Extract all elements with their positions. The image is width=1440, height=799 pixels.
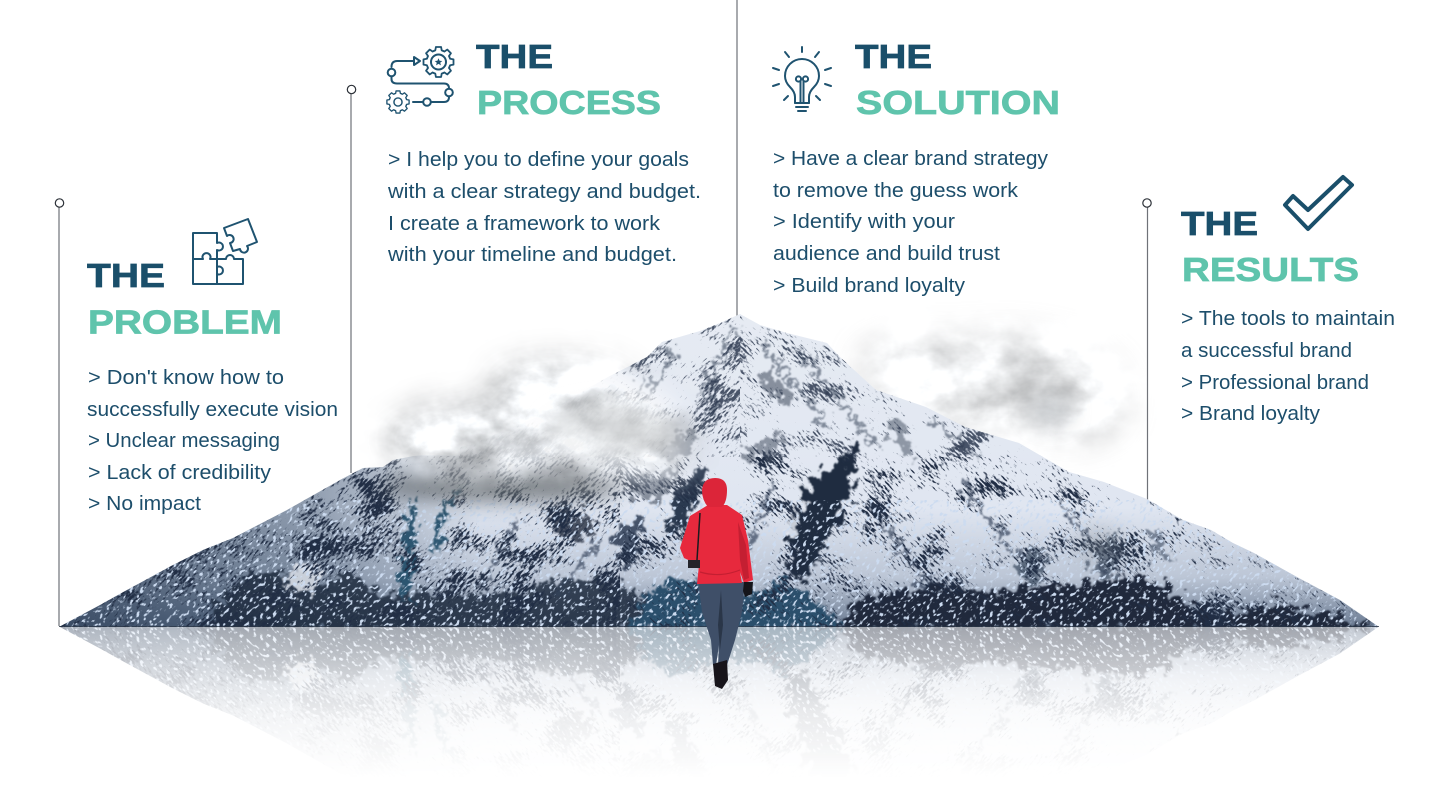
text: problem list: > Don't know how to xyxy=(88,367,284,389)
text: problem list: > No impact xyxy=(88,493,201,515)
text: solution list: > Identify with your xyxy=(773,211,955,233)
text: solution list: > Have a clear brand strategy xyxy=(773,148,1048,170)
icon: check mark xyxy=(1285,177,1352,229)
guide line: problem xyxy=(55,199,64,626)
text: process paragraph: > I help you to define your goals xyxy=(388,149,689,171)
icon: light bulb xyxy=(773,47,831,111)
boots xyxy=(713,660,728,689)
jacket xyxy=(680,505,753,584)
heading: the solution: SOLUTION xyxy=(856,84,1060,121)
text: problem list: > Lack of credibility xyxy=(88,462,271,484)
strap and camera xyxy=(697,513,700,560)
mountain xyxy=(50,305,1390,630)
heading: the results: THE xyxy=(1181,205,1258,242)
heading: the results: RESULTS xyxy=(1182,251,1359,288)
text: problem list: successfully execute vision xyxy=(87,399,338,421)
heading: the results xyxy=(1181,205,1359,288)
text: solution list xyxy=(773,148,1048,297)
heading: the problem xyxy=(87,257,282,340)
text: results list: > The tools to maintain xyxy=(1181,308,1395,330)
cloud behind mountain right xyxy=(860,335,1125,441)
text: process paragraph: I create a framework to work xyxy=(388,213,661,235)
text: process paragraph: with a clear strategy and budget. xyxy=(387,181,701,203)
hood xyxy=(702,478,727,507)
text: results list: > Brand loyalty xyxy=(1181,403,1320,425)
text: results list: a successful brand xyxy=(1181,340,1352,362)
glove xyxy=(743,582,753,597)
guide line: process xyxy=(347,85,356,473)
text: solution list: audience and build trust xyxy=(773,243,1000,265)
guide line: results xyxy=(1143,199,1151,500)
heading: the problem: THE xyxy=(87,257,165,294)
text: results list: > Professional brand xyxy=(1181,372,1369,394)
guide line: solution xyxy=(736,0,738,318)
heading: the problem: PROBLEM xyxy=(88,304,282,340)
heading: the solution xyxy=(855,38,1060,121)
heading: the process: THE xyxy=(476,38,553,75)
text: process paragraph xyxy=(387,149,701,266)
cloud over mountain left xyxy=(380,361,1122,561)
text: solution list: > Build brand loyalty xyxy=(773,275,965,297)
text: solution list: to remove the guess work xyxy=(773,180,1019,202)
person walking in red jacket xyxy=(680,478,753,689)
section: the process xyxy=(387,38,701,266)
heading: the solution: THE xyxy=(855,38,932,75)
text: process paragraph: with your timeline and budget. xyxy=(387,244,677,266)
legs xyxy=(698,582,745,665)
heading: the process xyxy=(476,38,661,121)
mountain reflection xyxy=(60,627,1378,753)
icon: gears and flow xyxy=(387,47,454,113)
text: problem list: > Unclear messaging xyxy=(88,430,280,452)
section: the problem xyxy=(87,219,338,515)
text: results list xyxy=(1181,308,1395,425)
section: the results xyxy=(1181,177,1395,425)
icon: puzzle xyxy=(193,219,257,284)
text: problem list xyxy=(87,367,338,515)
section: the solution xyxy=(773,38,1060,297)
heading: the process: PROCESS xyxy=(477,84,661,121)
